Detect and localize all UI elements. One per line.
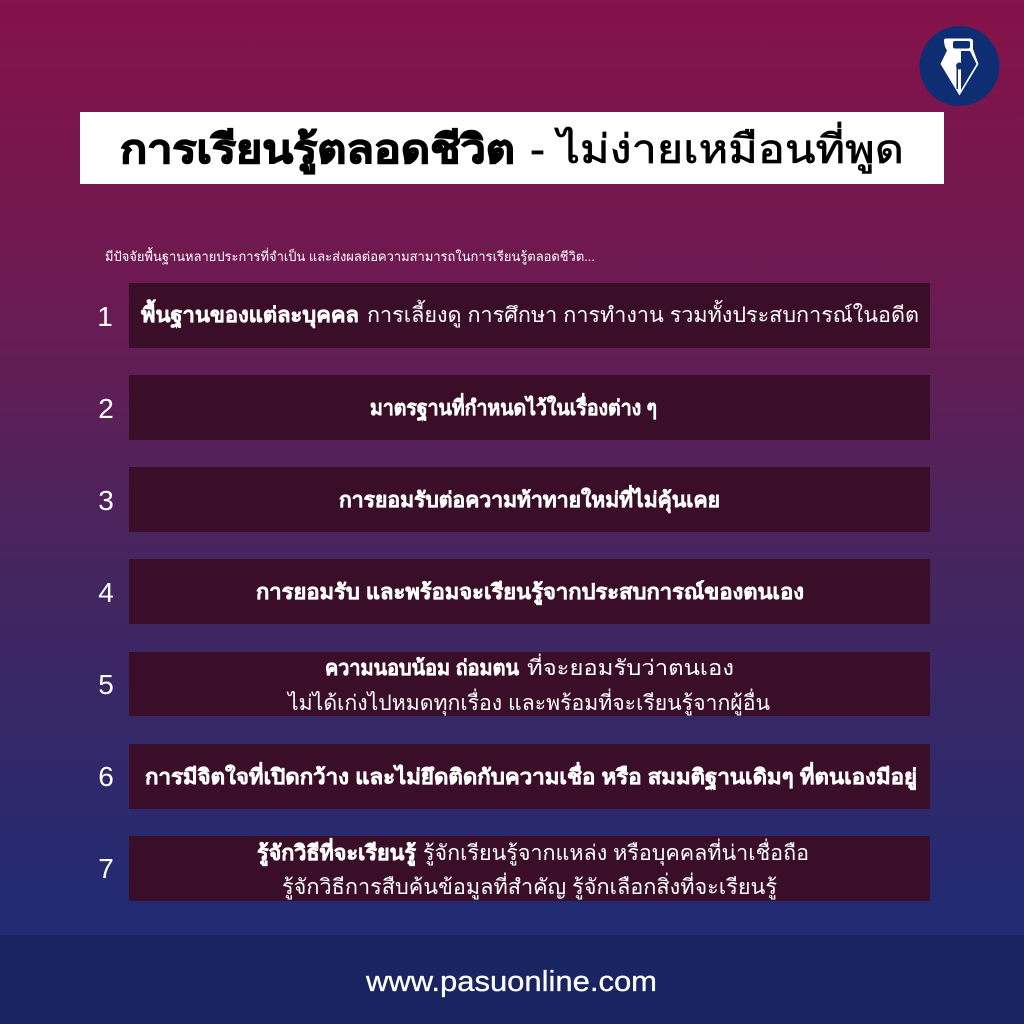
footer website url: www.pasuonline.com [365,966,657,998]
row 7 [98,836,930,901]
row 3 [98,467,930,532]
title regular part: - ไม่ง่ายเหมือนที่พูด [530,122,904,173]
row 4 [98,559,930,624]
number 5: 5 [98,669,114,700]
number 4: 4 [98,577,114,608]
row 1 bold text: พื้นฐานของแต่ละบุคคล [141,299,359,329]
row 5 [98,652,930,716]
number 1: 1 [97,301,113,332]
row 5 regular line 1: ที่จะยอมรับว่าตนเอง [527,653,734,680]
row 4 text: การยอมรับ และพร้อมจะเรียนรู้จากประสบการณ์ของตนเอง [256,580,804,606]
row 7 bold text: รู้จักวิธีที่จะเรียนรู้ [257,837,417,867]
row 1 [97,283,930,348]
row 5 bold text: ความนอบน้อม ถ่อมตน [325,656,520,680]
title banner [80,112,944,184]
number 6: 6 [98,761,114,792]
row 5 regular line 2: ไม่ได้เก่งไปหมดทุกเรื่อง และพร้อมที่จะเรียนรู้จากผู้อื่น [286,688,770,716]
number 2: 2 [98,393,114,424]
row 6 [98,744,930,809]
footer band [0,935,1024,1024]
row 2 [98,375,930,440]
row 1 regular text: การเลี้ยงดู การศึกษา การทำงาน รวมทั้งประสบการณ์ในอดีต [367,300,919,328]
icon: fountain pen nib logo [920,26,1000,106]
row 7 regular line 2: รู้จักวิธีการสืบค้นข้อมูลที่สำคัญ รู้จักเลือกสิ่งที่จะเรียนรู้ [282,872,777,900]
row 3 text: การยอมรับต่อความท้าทายใหม่ที่ไม่คุ้นเคย [339,484,720,514]
title bold part: การเรียนรู้ตลอดชีวิต [120,128,515,174]
number 7: 7 [98,853,114,884]
row 7 regular line 1: รู้จักเรียนรู้จากแหล่ง หรือบุคคลที่น่าเชื่อถือ [423,838,809,866]
row 2 text: มาตรฐานที่กำหนดไว้ในเรื่องต่าง ๆ [370,392,657,422]
number 3: 3 [98,485,114,516]
intro text: มีปัจจัยพื้นฐานหลายประการที่จำเป็น และส่งผลต่อความสามารถในการเรียนรู้ตลอดชีวิต... [105,247,595,265]
row 6 text: การมีจิตใจที่เปิดกว้าง และไม่ยึดติดกับความเชื่อ หรือ สมมติฐานเดิมๆ ที่ตนเองมีอยู่ [145,761,917,791]
